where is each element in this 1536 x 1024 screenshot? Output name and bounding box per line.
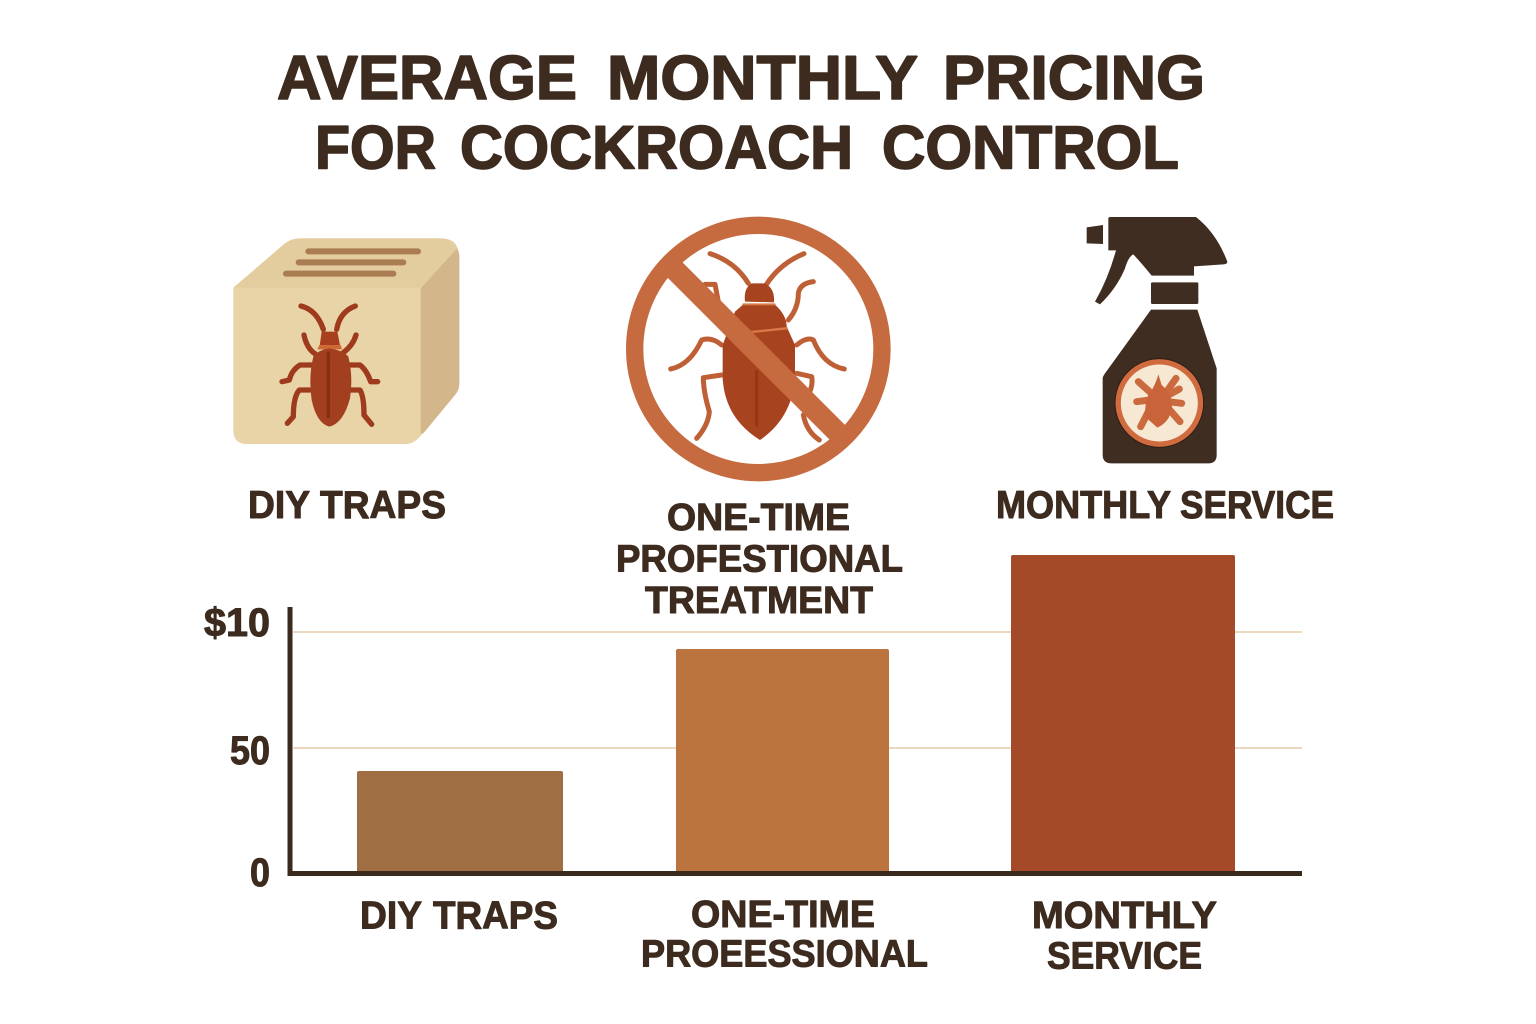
title [277,44,1205,182]
bar: one-time professional [676,649,889,873]
label: one-time professional treatment: ONE-TIME [667,497,850,539]
y-axis labels: $10 [204,601,270,645]
y-axis labels: 50 [230,729,270,773]
label: DIY traps: TRAPS [320,484,446,527]
icon: spray bottle [1087,217,1227,463]
bar chart [204,555,1302,978]
x-axis label: one-time professional: ONE-TIME [691,894,875,936]
title: AVERAGE [277,44,577,113]
x-axis label: DIY traps [360,894,558,938]
x-axis label: monthly service: MONTHLY [1032,895,1217,937]
label: one-time professional treatment [616,497,903,622]
chart axes [288,607,1302,876]
y-axis labels [204,601,270,895]
bug on box [282,306,378,427]
y-axis labels: 0 [250,851,270,895]
icon: DIY trap box [233,238,459,444]
label: monthly service: MONTHLY [996,484,1171,527]
label: monthly service: SERVICE [1180,484,1334,527]
bug in sign [671,254,844,440]
label: one-time professional treatment: TREATMENT [645,580,873,622]
x-axis label: monthly service [1032,895,1217,978]
prohibition ring and slash [635,225,882,473]
icon: no-cockroach prohibition sign [635,225,882,473]
label: one-time professional treatment: PROFESTIONAL [616,538,903,580]
label: monthly service [996,484,1334,527]
title: MONTHLY [607,44,918,113]
x-axis label: DIY traps: DIY [360,894,422,938]
title: FOR [315,114,436,182]
label: DIY traps [248,484,446,527]
title: PRICING [943,44,1205,113]
title: COCKROACH [460,114,853,182]
bottle label [1115,359,1204,447]
bar: monthly service [1011,555,1235,873]
title: CONTROL [882,114,1179,182]
bar: DIY traps [357,771,563,873]
x-axis label: one-time professional [641,894,928,976]
x-axis label: monthly service: SERVICE [1047,936,1202,978]
x-axis label: one-time professional: PROEESSIONAL [641,934,928,976]
label: DIY traps: DIY [248,484,310,527]
x-axis label: DIY traps: TRAPS [433,894,558,938]
